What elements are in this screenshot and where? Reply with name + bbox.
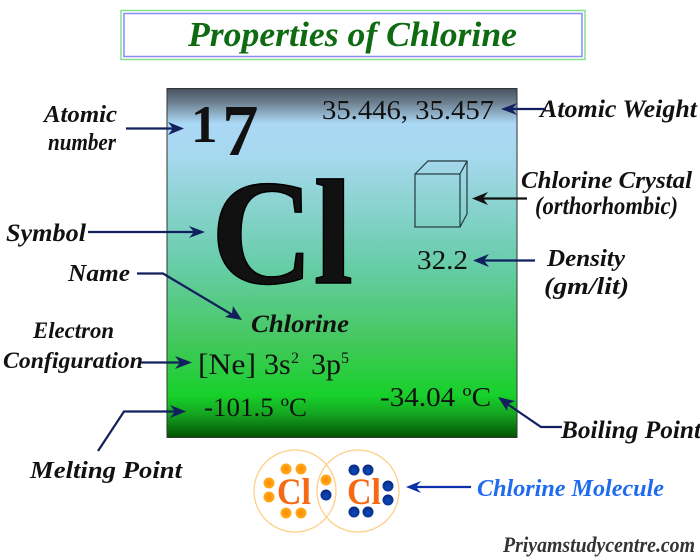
electron configuration value: 3p <box>311 348 341 381</box>
electron configuration value: [Ne] <box>198 348 256 381</box>
label: electron configuration: Configuration <box>3 348 143 373</box>
panel: element tile <box>167 88 517 438</box>
label: atomic weight: Atomic Weight <box>538 96 698 123</box>
label: density: Density <box>546 246 625 272</box>
label: name: Name <box>67 261 130 287</box>
left Cl atom symbol: Cl <box>277 472 311 513</box>
density value: 32.2 <box>417 245 468 275</box>
melting point value: -101.5 ºC <box>204 393 307 422</box>
label: melting point: Melting Point <box>29 458 183 484</box>
electron configuration value: 2 <box>291 350 299 367</box>
element name: Chlorine <box>251 311 349 338</box>
electron configuration value: 5 <box>341 350 349 367</box>
label: atomic number: number <box>48 130 117 156</box>
arrow: electron configuration <box>141 356 192 369</box>
title banner <box>121 10 585 60</box>
label: electron configuration: Electron <box>32 318 114 343</box>
label: density <box>544 246 629 300</box>
atomic number value: 7 <box>222 90 258 171</box>
orange electrons <box>264 464 332 518</box>
label: density: (gm/lit) <box>544 274 629 300</box>
arrow: boiling point <box>498 397 562 427</box>
label: electron configuration <box>3 318 143 373</box>
arrow: atomic number <box>126 122 184 135</box>
atomic number value: 1 <box>191 96 218 154</box>
blue electrons <box>320 464 394 518</box>
arrow: crystal <box>472 192 527 205</box>
label: chlorine crystal: Chlorine Crystal <box>521 168 692 194</box>
label: chlorine crystal <box>521 168 692 220</box>
arrow: chlorine molecule <box>406 481 471 493</box>
boiling point value: -34.04 ºC <box>380 382 491 412</box>
chlorine molecule diagram <box>254 450 399 532</box>
right Cl atom symbol: Cl <box>347 472 381 513</box>
atomic weight value: 35.446, 35.457 <box>322 95 494 125</box>
arrow: symbol <box>88 226 205 238</box>
label: chlorine crystal: (orthorhombic) <box>535 193 678 220</box>
label: boiling point: Boiling Point <box>560 417 700 444</box>
arrow: name <box>137 274 242 320</box>
label: atomic number: Atomic <box>42 102 117 128</box>
label: chlorine molecule: Chlorine Molecule <box>477 476 664 502</box>
title banner: Properties of Chlorine <box>187 15 517 54</box>
icon: orthorhombic crystal <box>415 161 467 227</box>
electron configuration value: 3s <box>264 348 291 381</box>
label: atomic number <box>42 102 117 156</box>
arrow: density <box>473 254 535 267</box>
label: symbol: Symbol <box>6 220 86 247</box>
arrow: melting point <box>98 405 186 451</box>
arrow: atomic weight <box>501 103 546 115</box>
element symbol: Cl <box>211 150 353 316</box>
electron configuration value <box>198 348 349 381</box>
